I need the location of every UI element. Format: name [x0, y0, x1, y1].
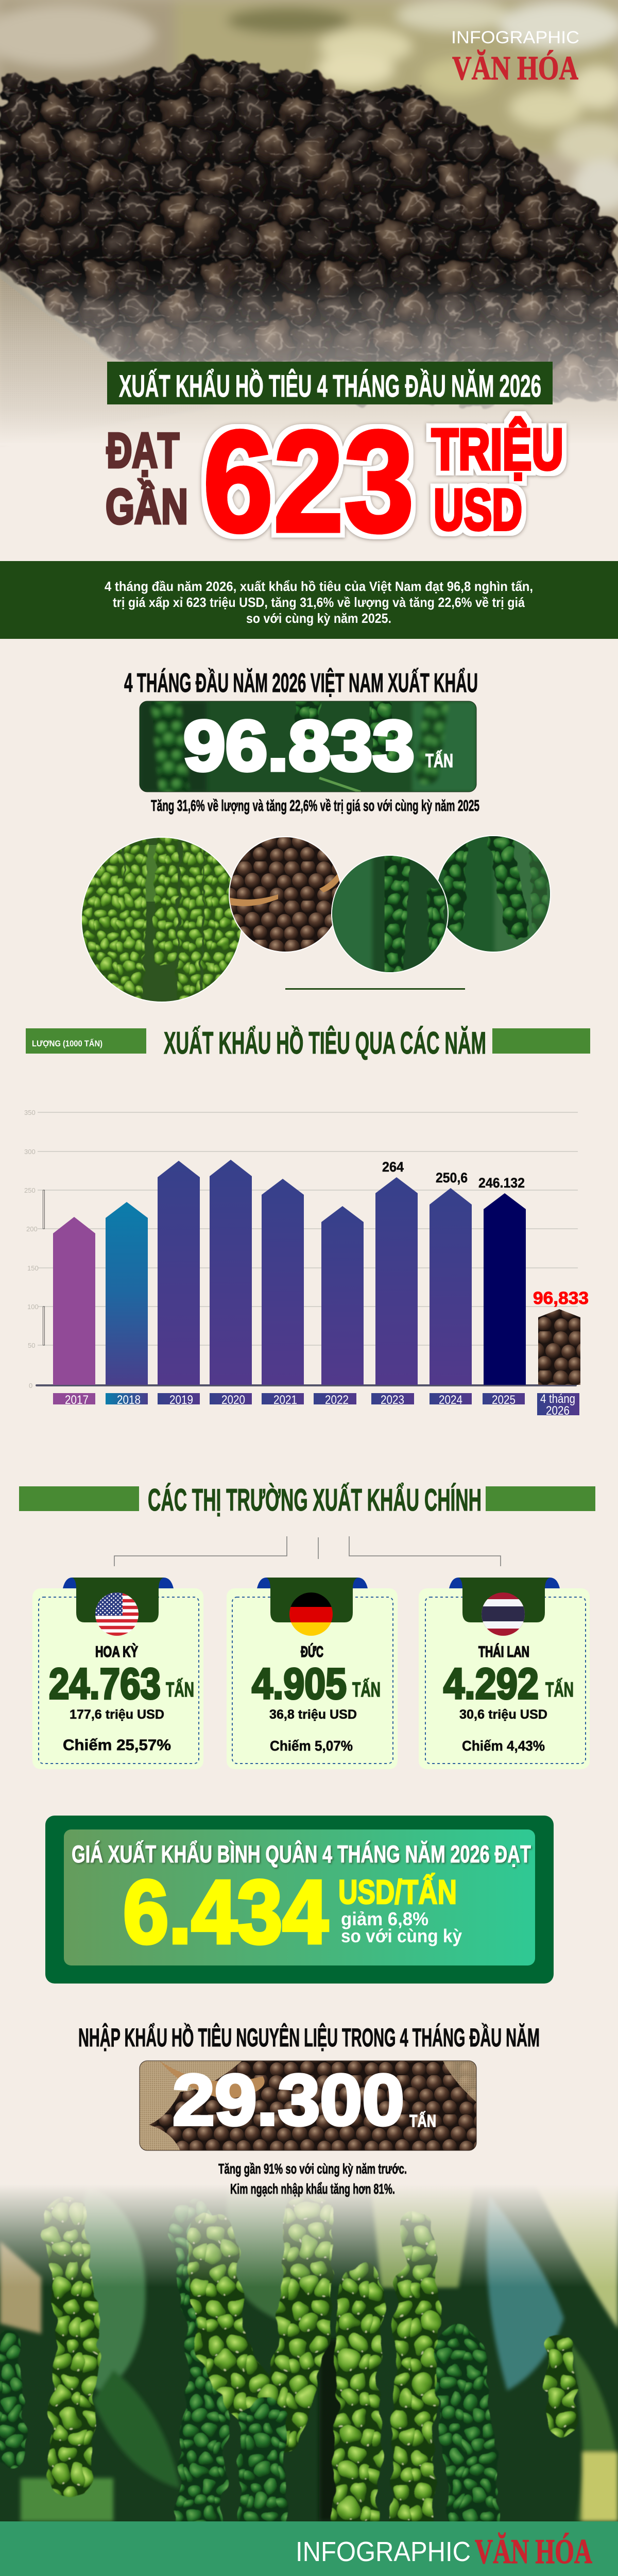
chart grid and y axis: 0: [29, 1382, 32, 1389]
year labels: 4 tháng: [540, 1392, 575, 1406]
market card: Germany: Chiếm 5,07%: [270, 1738, 353, 1754]
market card: Germany: TẤN: [352, 1677, 381, 1701]
logo: Infographic Văn Hóa: [451, 28, 579, 87]
intro band: [0, 561, 618, 639]
panel: average export price: 6.434: [123, 1861, 328, 1962]
market card: United States: 177,6 triệu USD: [70, 1707, 164, 1722]
year labels: 2017: [65, 1393, 89, 1407]
market card: United States: TẤN: [166, 1677, 194, 1701]
year labels: 2024: [439, 1393, 462, 1407]
bar 2022: [321, 1206, 364, 1385]
chart grid and y axis: [24, 1109, 578, 1389]
panel: average export price: so với cùng kỳ: [341, 1925, 462, 1946]
market card: United States: [32, 1578, 203, 1769]
market card: Germany: [227, 1578, 398, 1769]
headline: đạt gần 623 triệu USD: TRIỆU: [432, 417, 563, 482]
chart grid and y axis: 300: [24, 1148, 36, 1156]
chart grid and y axis: 200: [26, 1225, 38, 1233]
year labels: 2026: [546, 1404, 570, 1418]
bar 2020: [210, 1160, 252, 1385]
divider line under photos: [285, 988, 465, 990]
chart grid and y axis: 100: [27, 1303, 39, 1311]
stat box: 29.300 tấn: TẤN: [409, 2111, 436, 2130]
intro band: so với cùng kỳ năm 2025.: [246, 611, 391, 626]
year labels: 2019: [169, 1393, 193, 1407]
logo: Infographic Văn Hóa: INFOGRAPHIC: [451, 28, 579, 47]
year labels: 2023: [381, 1393, 404, 1407]
photo circle: black pepper in spoon: [229, 836, 342, 953]
bar 2021: [262, 1179, 304, 1385]
bar 2019: [158, 1161, 200, 1385]
value labels: 264: [382, 1159, 404, 1175]
value labels: 246.132: [478, 1175, 525, 1191]
chart grid and y axis: 350: [24, 1109, 36, 1116]
bar 2018: [106, 1202, 148, 1385]
bar 2025: [484, 1193, 526, 1385]
photo circle: green pepper clusters: [81, 835, 243, 1005]
headline: đạt gần 623 triệu USD: [106, 401, 563, 562]
year labels: 2021: [273, 1393, 297, 1407]
panel: average export price: giảm 6,8%: [341, 1908, 428, 1929]
year labels: 2025: [492, 1393, 516, 1407]
market card: Germany: ĐỨC: [301, 1643, 323, 1660]
market card: Germany: 36,8 triệu USD: [269, 1707, 357, 1722]
panel: average export price: USD/TẤN: [338, 1873, 457, 1911]
year labels: 2018: [117, 1393, 141, 1407]
stat box: 96.833 tấn: 96.833: [183, 706, 415, 786]
market card: Thailand: TẤN: [545, 1677, 574, 1701]
photo circle: green pepper right: [436, 835, 551, 953]
headline: đạt gần 623 triệu USD: ĐẠT: [107, 423, 179, 478]
year labels: 2022: [325, 1393, 349, 1407]
value labels: [382, 1159, 589, 1308]
flag: Thailand: [482, 1592, 525, 1636]
connector lines to market cards: [114, 1536, 501, 1566]
value labels: 96,833: [533, 1289, 589, 1308]
stat box: 29.300 tấn: [140, 2059, 476, 2150]
flag: Germany: [289, 1592, 333, 1636]
stat box: 29.300 tấn: 29.300: [173, 2059, 404, 2140]
footer bar with logo: [0, 2521, 618, 2576]
caption: imports growth: [218, 2161, 407, 2197]
market card: United States: HOA KỲ: [95, 1643, 138, 1660]
bar chart: export volume 2017 to 4 months 2026: [24, 1109, 589, 1418]
bar 2024: [430, 1188, 472, 1385]
footer photo: green pepper vines: [0, 2184, 618, 2524]
chart grid and y axis: 150: [27, 1264, 39, 1272]
market card: Thailand: THÁI LAN: [478, 1643, 529, 1660]
value labels: 250,6: [436, 1170, 468, 1185]
headline: đạt gần 623 triệu USD: 623: [203, 401, 414, 562]
caption: imports growth: Kim ngạch nhập khẩu tăng hơn 81%.: [230, 2181, 395, 2197]
chart grid and y axis: 250: [24, 1187, 36, 1194]
market card: Thailand: 30,6 triệu USD: [459, 1707, 547, 1722]
hero: pile of black pepper on burlap sacks: [0, 0, 618, 446]
chart grid and y axis: 50: [28, 1342, 35, 1349]
heading: exports over the years: LƯỢNG (1000 TẤN): [32, 1039, 102, 1048]
year labels: [53, 1392, 579, 1418]
market card: Thailand: Chiếm 4,43%: [462, 1738, 545, 1754]
footer bar with logo: INFOGRAPHIC: [296, 2536, 471, 2567]
headline: đạt gần 623 triệu USD: GẦN: [106, 479, 188, 534]
headline: đạt gần 623 triệu USD: USD: [434, 478, 522, 542]
stat box: 96.833 tấn: TẤN: [425, 750, 453, 771]
market card: Thailand: [419, 1578, 590, 1769]
market card: United States: 24.763: [49, 1659, 161, 1708]
bar 4 months 2026 with pepper texture: [538, 1309, 580, 1385]
stat box: 96.833 tấn: [139, 701, 477, 792]
market card: United States: Chiếm 25,57%: [63, 1737, 171, 1754]
market card: Thailand: 4.292: [443, 1659, 539, 1708]
intro band: trị giá xấp xỉ 623 triệu USD, tăng 31,6% về lượng và tăng 22,6% về trị giá: [113, 595, 525, 610]
bar 2017: [53, 1217, 95, 1385]
panel: average export price: [45, 1816, 554, 1984]
caption: imports growth: Tăng gần 91% so với cùng kỳ năm trước.: [218, 2161, 407, 2177]
year labels: 2020: [221, 1393, 245, 1407]
logo: Infographic Văn Hóa: VĂN HÓA: [452, 49, 578, 87]
intro band: 4 tháng đầu năm 2026, xuất khẩu hồ tiêu của Việt Nam đạt 96,8 nghìn tấn,: [105, 579, 533, 594]
photo circle: green pepper centre: [331, 855, 449, 973]
market card: Germany: 4.905: [252, 1659, 347, 1708]
flag: USA: [95, 1592, 139, 1636]
bar 2023: [375, 1177, 418, 1385]
